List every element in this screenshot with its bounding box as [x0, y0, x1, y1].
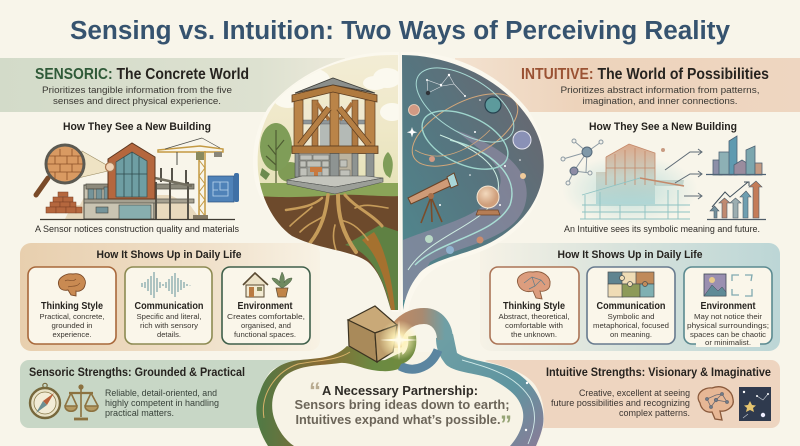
- heading: sensoric: SENSORIC: The Concrete World: [35, 66, 249, 83]
- quote background: [257, 350, 544, 446]
- text line 3: complex patterns.: [619, 408, 690, 418]
- soil: [264, 194, 398, 310]
- text: sensor caption: A Sensor notices construction quality and materials: [35, 224, 240, 234]
- telescope: [408, 173, 458, 223]
- card: thinking style sensoric: grounded in: [52, 321, 92, 330]
- text: intuitive description line 2: imagination, and inner connections.: [582, 96, 738, 107]
- text: sensoric description line 2: senses and direct physical experience.: [53, 96, 221, 107]
- city skyline: [713, 136, 762, 175]
- icon: puzzle: [608, 272, 654, 297]
- card: environment intuitive: or minimalist.: [705, 338, 751, 347]
- card: communication intuitive: Symbolic and: [608, 312, 654, 321]
- icon: picture and frame corners: [704, 274, 752, 296]
- slab: [287, 176, 383, 187]
- glow: [379, 320, 419, 360]
- card: communication intuitive: metaphorical, focused: [593, 321, 669, 330]
- stone walls: [299, 154, 330, 180]
- panel: sensoric strengths: [20, 360, 320, 428]
- heading: How It Shows Up in Daily Life: [558, 249, 702, 261]
- icon: scales: [65, 385, 98, 419]
- left ribbon: [256, 346, 404, 446]
- crystal ball: [476, 186, 500, 215]
- roof: [295, 78, 375, 93]
- card: communication sensoric: Specific and literal,: [136, 312, 202, 321]
- panel: intuitive daily life: [480, 243, 780, 351]
- callout: partnership quote: [294, 378, 512, 438]
- central illustration: cosmos half: [400, 50, 550, 315]
- arrows: [665, 149, 702, 199]
- card: thinking style intuitive: the unknown.: [511, 330, 557, 339]
- panel: intuitive header: [455, 58, 800, 112]
- brick tower: [108, 143, 155, 199]
- band: [292, 146, 378, 154]
- building: [596, 144, 684, 204]
- card: thinking style intuitive: Abstract, theoretical,: [498, 312, 570, 321]
- ring lower: [400, 350, 438, 369]
- tower on foundation: [287, 78, 383, 194]
- text: intuitive description: Prioritizes abstract information from patterns,: [560, 85, 760, 96]
- title: Sensing vs. Intuition: Two Ways of Perceiving Reality: [70, 17, 731, 45]
- panel: sensoric daily life: [20, 243, 320, 351]
- text: sensoric description: Prioritizes tangible information from the five: [42, 85, 232, 96]
- top beams: [292, 85, 377, 102]
- card: environment intuitive: [684, 267, 772, 347]
- text line 3: practical matters.: [105, 408, 174, 418]
- heading: sensoric building: How They See a New Building: [63, 121, 211, 133]
- upper small braces: [317, 103, 352, 120]
- roots: [286, 195, 388, 252]
- lower ribbon: [345, 225, 400, 312]
- card: thinking style intuitive: comfortable with: [505, 321, 563, 330]
- card: thinking style intuitive: Thinking Style: [503, 301, 565, 312]
- card: environment intuitive: May not notice their: [694, 312, 763, 321]
- back posts: [312, 100, 358, 146]
- illustration: sensor building: [36, 138, 239, 220]
- steel posts: [295, 154, 374, 183]
- flowing ribbon: [403, 130, 527, 300]
- sparkle: [407, 127, 417, 137]
- callout: partnership quote: Intuitives expand what’s possible.: [296, 412, 500, 427]
- planets: [408, 104, 420, 116]
- card: communication intuitive: on meaning.: [610, 330, 652, 339]
- card: communication sensoric: Communication: [134, 301, 204, 312]
- ring upper: [394, 316, 445, 348]
- icon: sound wave: [139, 272, 190, 298]
- card: thinking style sensoric: Thinking Style: [41, 301, 103, 312]
- text: Creative, excellent at seeing: [579, 388, 690, 398]
- callout: partnership quote: ”: [500, 411, 512, 438]
- illustration: intuitive building: [561, 136, 766, 225]
- magnifier: [78, 151, 110, 178]
- card: environment intuitive: spaces can be chaotic: [690, 330, 766, 339]
- heading: Intuitive Strengths: Visionary & Imaginative: [546, 366, 772, 379]
- cube: [348, 306, 397, 362]
- ribbon: partnership frame: [256, 306, 544, 446]
- lower floors: [84, 185, 154, 219]
- diagonal braces: [300, 108, 369, 145]
- card: communication sensoric: details.: [157, 330, 181, 339]
- text line 2: future possibilities and recognizing: [551, 398, 690, 408]
- card: environment sensoric: organised, and: [241, 321, 291, 330]
- card: thinking style sensoric: [28, 267, 116, 344]
- card: communication sensoric: [125, 267, 212, 344]
- right ribbon: [436, 334, 543, 446]
- panel: intuitive strengths: [480, 360, 780, 428]
- posts: [294, 88, 375, 146]
- icon: brain: [58, 274, 85, 296]
- trees: [260, 123, 393, 183]
- icon: house and plant: [243, 272, 292, 297]
- constellation: [427, 75, 465, 96]
- grass: [255, 183, 400, 200]
- text line 2: highly competent in handling: [105, 398, 219, 408]
- card: thinking style intuitive: [490, 267, 579, 344]
- card: environment sensoric: functional spaces.: [234, 330, 296, 339]
- heading: intuitive building: How They See a New Building: [589, 121, 737, 133]
- icon: compass: [30, 383, 60, 418]
- icon: starry sky: [739, 387, 771, 421]
- interior and concrete: [303, 104, 366, 146]
- bricks: [46, 192, 82, 213]
- text: Reliable, detail-oriented, and: [105, 388, 217, 398]
- central illustration: earth half: [258, 55, 398, 310]
- clouds: [272, 68, 404, 121]
- ring green: [394, 336, 412, 360]
- card: thinking style sensoric: experience.: [52, 330, 92, 339]
- heading: How It Shows Up in Daily Life: [96, 249, 242, 261]
- card: thinking style sensoric: Practical, concrete,: [40, 312, 104, 321]
- panel: sensoric header: [0, 58, 345, 112]
- heading: Sensoric Strengths: Grounded & Practical: [29, 366, 245, 379]
- network: [561, 139, 603, 185]
- card: environment intuitive: Environment: [700, 301, 756, 312]
- card: environment sensoric: Environment: [238, 301, 293, 312]
- card: environment intuitive: physical surroundings;: [687, 321, 769, 330]
- blueprint: [208, 173, 239, 202]
- card: environment sensoric: Creates comfortable,: [227, 312, 305, 321]
- card: communication intuitive: Communication: [596, 301, 666, 312]
- callout: partnership quote: “: [309, 378, 321, 405]
- crane: [158, 138, 223, 216]
- icon: network brain: [517, 272, 550, 299]
- card: communication intuitive: [587, 267, 675, 344]
- text: intuitive caption: An Intuitive sees its symbolic meaning and future.: [564, 224, 760, 234]
- growth chart: [710, 181, 762, 218]
- icon: networked brain: [698, 387, 733, 420]
- heading: intuitive: INTUITIVE: The World of Possibilities: [521, 66, 769, 83]
- card: environment sensoric: [222, 267, 310, 344]
- callout: partnership quote: Sensors bring ideas down to earth;: [294, 397, 510, 412]
- callout: partnership quote: A Necessary Partnership:: [322, 383, 478, 398]
- orbits: [412, 67, 518, 170]
- card: communication sensoric: rich with sensory: [140, 321, 198, 330]
